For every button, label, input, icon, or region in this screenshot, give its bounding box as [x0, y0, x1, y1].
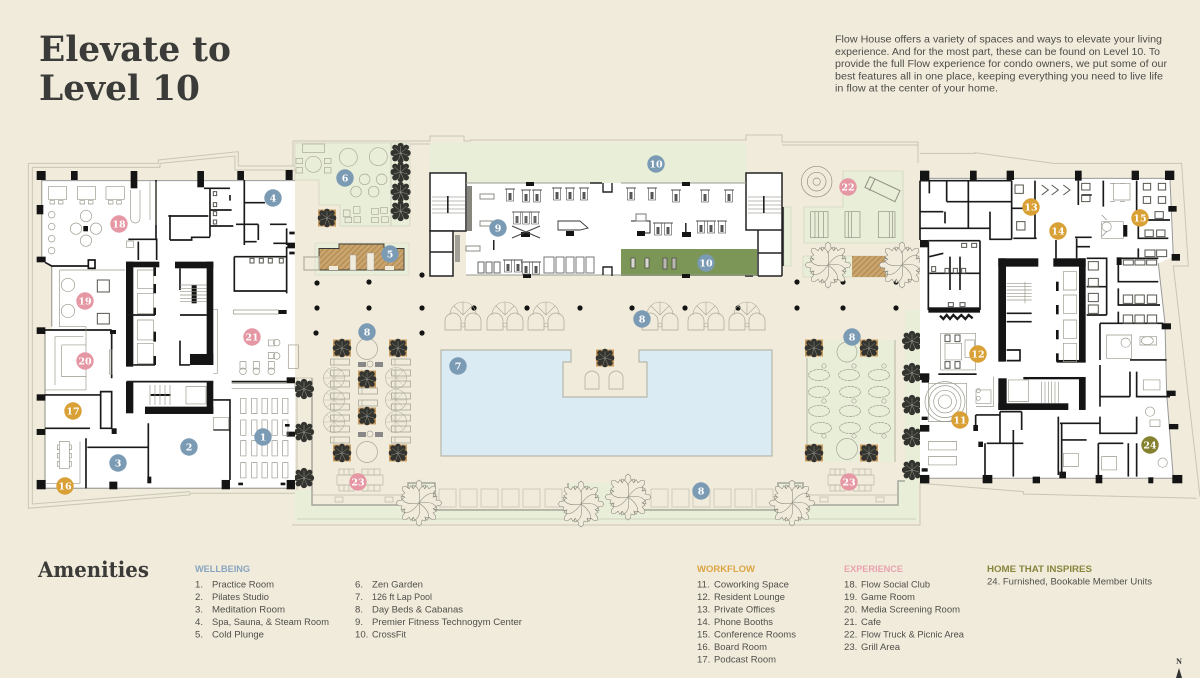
wellbeing badges: 8	[639, 314, 646, 326]
lap pool	[441, 350, 772, 456]
experience badges: 23	[842, 478, 856, 488]
experience badges: 22	[841, 182, 855, 194]
east patio furniture	[808, 342, 890, 460]
intro paragraph: experience. And for the most part, these can be found on Level 10. To	[835, 47, 1160, 58]
central courtyard terrace	[292, 135, 920, 525]
legend: experience: EXPERIENCE	[844, 564, 903, 574]
practice room mats	[241, 398, 288, 478]
wellbeing badges: 3	[115, 458, 121, 470]
title: Elevate to	[39, 29, 231, 70]
legend: workflow: Resident Lounge	[714, 592, 785, 603]
wellbeing badges: 4	[270, 194, 277, 204]
legend: wellbeing: CrossFit	[372, 630, 406, 640]
legend: experience: 18.	[844, 580, 857, 590]
legend: wellbeing: 4.	[195, 617, 203, 628]
legend: workflow: 12.	[697, 592, 710, 603]
wellbeing badges: 8	[364, 328, 371, 338]
wellbeing badges: 2	[186, 442, 192, 454]
legend: wellbeing: 6.	[355, 580, 363, 590]
wellbeing badges: 5	[387, 250, 393, 260]
wellbeing badges: 7	[455, 362, 461, 372]
legend: wellbeing: 1.	[195, 580, 203, 590]
legend: workflow: Conference Rooms	[714, 630, 796, 640]
legend: workflow: 15.	[697, 630, 710, 640]
planters with palms	[318, 209, 878, 462]
home badge: 24	[1143, 440, 1157, 452]
workflow badges: 16	[58, 482, 72, 492]
workflow badges: 11	[953, 416, 967, 426]
title: Level 10	[39, 68, 200, 109]
legend: wellbeing: WELLBEING	[195, 564, 250, 574]
wellbeing badges: 10	[649, 160, 663, 170]
legend: experience: 21.	[844, 617, 857, 628]
workflow badges: 14	[1051, 226, 1065, 238]
workflow badges: 12	[971, 350, 985, 360]
legend: wellbeing: 8.	[355, 604, 363, 616]
legend: workflow: 17.	[697, 654, 710, 666]
legend: wellbeing: Practice Room	[212, 580, 274, 590]
grill tables	[313, 469, 898, 502]
legend: home that inspires: 24. Furnished, Bookable Member Units	[987, 576, 1152, 588]
restroom fixtures	[213, 192, 283, 263]
legend: wellbeing: 10.	[355, 630, 368, 640]
legend: home that inspires: HOME THAT INSPIRES	[987, 564, 1092, 574]
palm trees	[294, 143, 922, 488]
experience badges: 18	[112, 220, 126, 230]
legend: wellbeing: 5.	[195, 630, 203, 640]
intro paragraph: in flow at the center of your home.	[835, 84, 998, 95]
wellbeing badges: 9	[495, 224, 502, 234]
legend: wellbeing	[195, 564, 523, 640]
office furniture	[932, 183, 1167, 368]
east planting strip	[905, 310, 920, 482]
legend: wellbeing: Spa, Sauna, & Steam Room	[212, 617, 329, 628]
legend: home that inspires	[987, 564, 1152, 588]
picnic lawn	[804, 171, 903, 243]
legend: wellbeing: Meditation Room	[212, 604, 285, 616]
legend: experience: Cafe	[861, 617, 881, 628]
home badge	[1141, 436, 1159, 454]
zen garden green area	[295, 143, 410, 226]
legend: workflow: Private Offices	[714, 604, 775, 616]
intro paragraph: Flow House offers a variety of spaces and ways to elevate your living	[835, 34, 1162, 46]
legend: wellbeing: Zen Garden	[372, 580, 423, 590]
colonnade columns	[313, 272, 899, 336]
legend: workflow: WORKFLOW	[697, 564, 756, 574]
location badges	[56, 155, 1159, 500]
legend: wellbeing: Day Beds & Cabanas	[372, 604, 463, 616]
stair core east	[746, 173, 782, 230]
wellbeing badges	[109, 155, 861, 500]
fitness center	[430, 173, 791, 278]
legend: experience: 23.	[844, 642, 857, 653]
south planting band	[295, 481, 918, 522]
legend: wellbeing: Cold Plunge	[212, 630, 264, 640]
wellbeing badges: 8	[849, 332, 856, 344]
intro paragraph: provide the full Flow experience for condo owners, we put some of our	[835, 59, 1168, 70]
workflow badges	[56, 198, 1149, 495]
stair core west	[430, 173, 466, 231]
wellbeing badges: 8	[698, 486, 705, 498]
social club furniture	[48, 187, 124, 204]
north arrow: N	[1176, 657, 1182, 666]
lounge planting	[940, 315, 973, 319]
large canopy trees	[396, 242, 925, 527]
workflow badges: 13	[1024, 202, 1038, 214]
legend: workflow	[697, 564, 796, 666]
gym walls	[466, 183, 757, 275]
legend: experience: Grill Area	[861, 642, 901, 653]
experience badges: 20	[78, 356, 92, 368]
legend: wellbeing: 7.	[355, 592, 363, 603]
wellbeing badges: 6	[342, 174, 349, 184]
intro paragraph	[835, 34, 1168, 95]
workflow badges: 17	[66, 406, 80, 418]
legend: experience: Flow Social Club	[861, 580, 930, 590]
picnic and flow truck furniture	[801, 166, 900, 238]
workflow badges: 15	[1133, 214, 1147, 224]
cold plunge deck	[315, 243, 409, 275]
legend: wellbeing: 9.	[355, 617, 363, 628]
legend: workflow: Coworking Space	[714, 580, 789, 590]
title	[39, 29, 231, 109]
experience badges	[76, 178, 858, 491]
legend: workflow: Phone Booths	[714, 617, 773, 628]
zen garden furniture	[296, 144, 388, 223]
floor plan	[28, 135, 1200, 527]
experience badges: 19	[78, 296, 92, 308]
legend: experience: Game Room	[861, 592, 915, 603]
wellbeing badges: 10	[699, 258, 713, 270]
gym equipment	[455, 186, 734, 274]
board room table	[45, 350, 112, 483]
experience badges: 21	[245, 332, 259, 344]
legend: workflow: Board Room	[714, 642, 767, 653]
wood decks	[304, 210, 886, 277]
north lawn	[430, 143, 746, 184]
legend: workflow: 14.	[697, 617, 710, 628]
crossfit zone	[621, 249, 757, 276]
intro paragraph: best features all in one place, keeping everything you need to live life	[835, 71, 1163, 82]
legend: workflow: 11.	[697, 580, 710, 590]
legend: experience: 20.	[844, 604, 857, 616]
east patio lawn	[807, 340, 895, 462]
legend: workflow: 16.	[697, 642, 710, 653]
legend: wellbeing: Premier Fitness Technogym Center	[372, 617, 523, 628]
legend: wellbeing: Pilates Studio	[212, 592, 269, 603]
east wing floor plan	[920, 153, 1200, 498]
experience badges: 23	[351, 478, 365, 488]
west wing floor plan	[28, 152, 298, 508]
cafe seating	[240, 340, 298, 369]
legend: wellbeing: 126 ft Lap Pool	[372, 592, 432, 603]
legend: wellbeing: 3.	[195, 604, 203, 616]
west patio furniture	[324, 338, 410, 462]
amenities heading: Amenities	[37, 557, 149, 582]
legend: experience: Media Screening Room	[861, 604, 960, 616]
legend: experience: 19.	[844, 592, 857, 603]
legend: experience: Flow Truck & Picnic Area	[861, 630, 965, 640]
legend: workflow: 13.	[697, 604, 710, 616]
wellbeing badges: 1	[260, 432, 266, 444]
legend: experience	[844, 564, 965, 653]
day beds south row	[439, 489, 773, 507]
legend: workflow: Podcast Room	[714, 654, 776, 666]
exterior chairs	[238, 232, 295, 485]
north arrow	[1176, 657, 1182, 678]
cabanas row	[445, 302, 765, 389]
legend: wellbeing: 2.	[195, 592, 203, 603]
legend: experience: 22.	[844, 630, 857, 640]
